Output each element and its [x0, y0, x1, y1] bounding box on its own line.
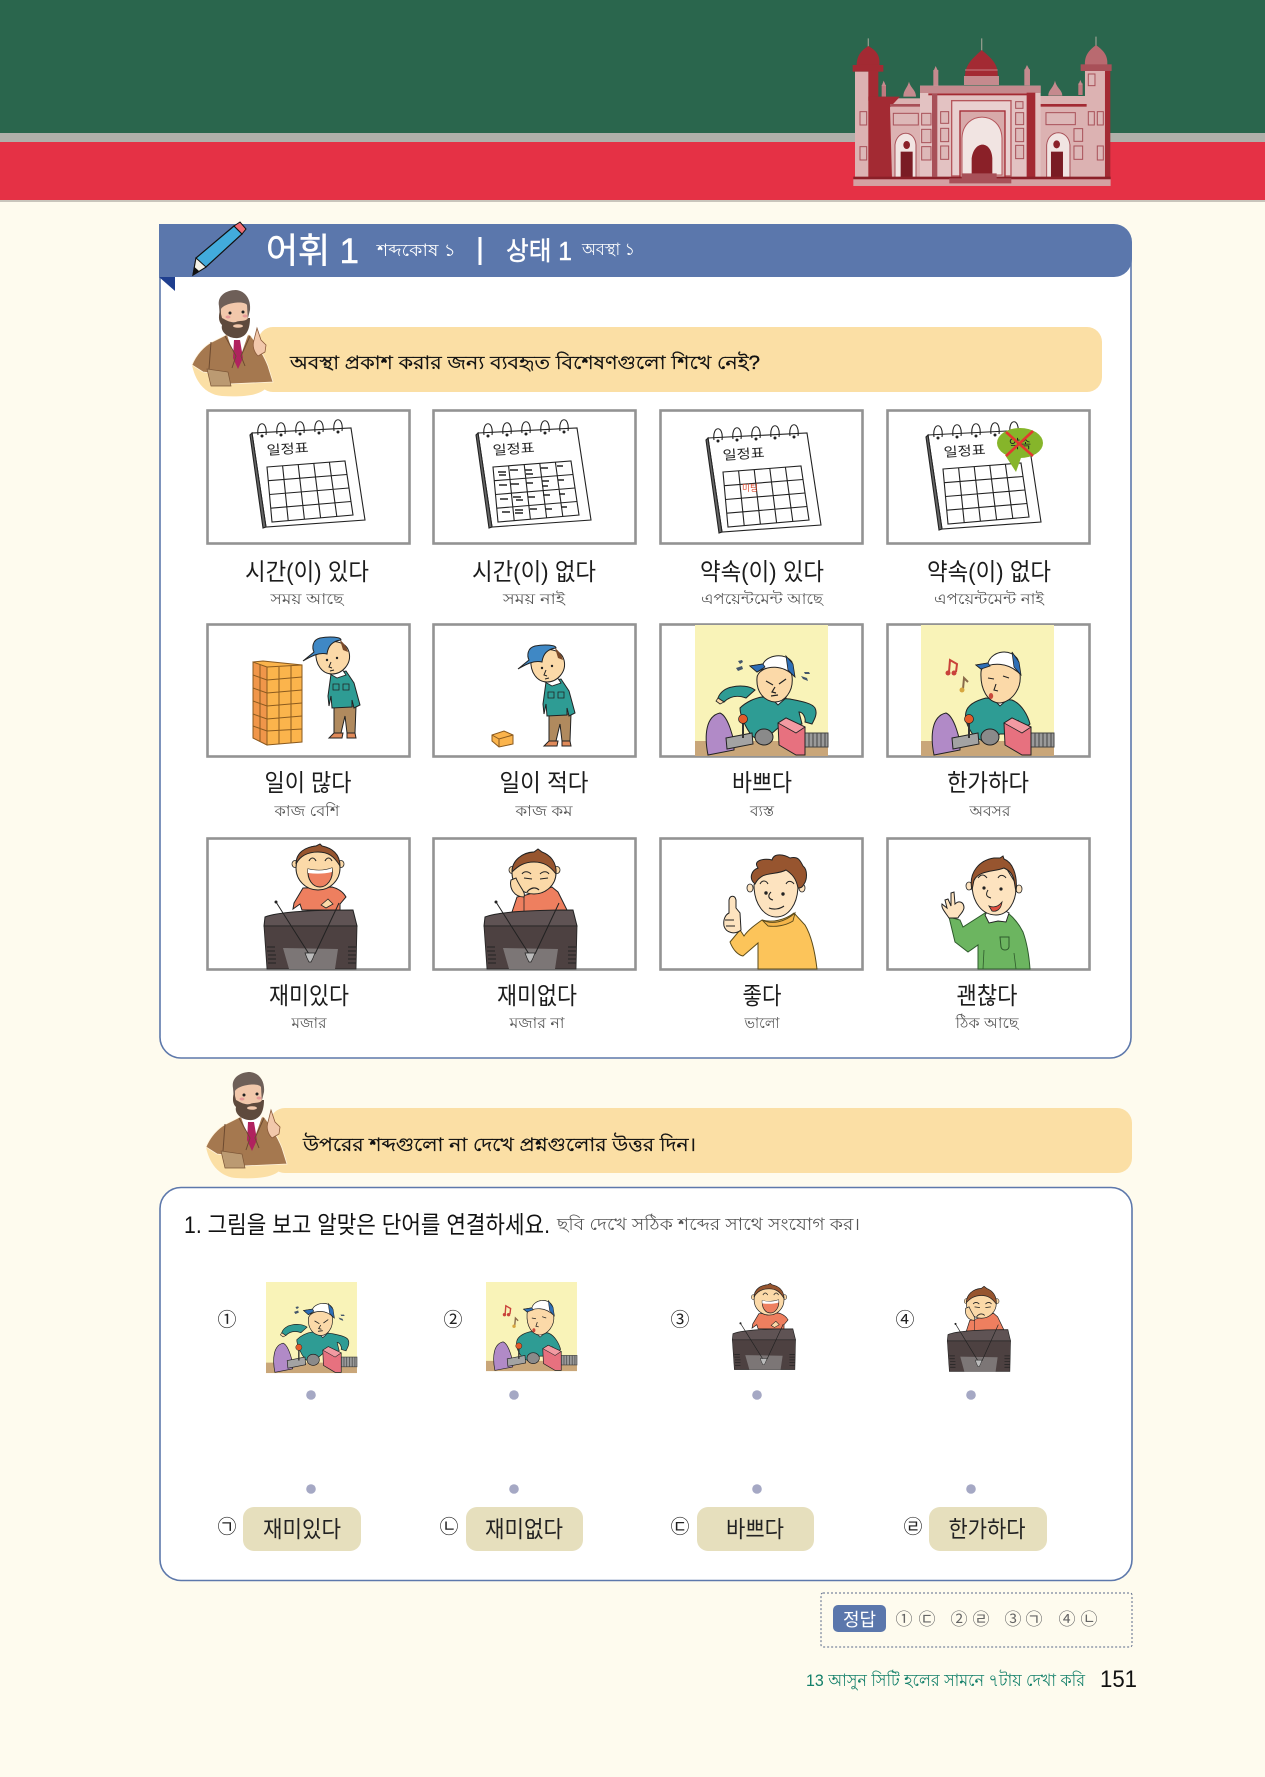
word option 3: 바쁘다 — [726, 1516, 784, 1542]
icon: pencil — [193, 222, 246, 275]
instruction text 2: উপরের শব্দগুলো না দেখে প্রশ্নগুলোর উত্তর দিন। — [302, 1133, 696, 1156]
panel: matching exercise — [160, 1188, 1132, 1580]
card: busy: 바쁘다 — [732, 770, 792, 797]
card: no appointment — [888, 410, 1090, 608]
card: much work: 일이 많다 — [264, 770, 352, 797]
item 3: ③ — [670, 1309, 690, 1331]
card: good: 좋다 — [742, 983, 782, 1010]
card: not fun: 재미없다 — [497, 983, 577, 1010]
card: busy: ব্যস্ত — [749, 803, 774, 820]
word option 3: ㉢ — [670, 1516, 690, 1538]
card: busy — [660, 624, 862, 820]
item 2: ② — [443, 1309, 463, 1331]
card: little work: 일이 적다 — [500, 770, 588, 797]
icon: teacher 2 — [206, 1072, 296, 1178]
card: no time — [434, 410, 636, 608]
card: idle: অবসর — [968, 803, 1011, 820]
word option 4: 한가하다 — [948, 1516, 1026, 1542]
card: no appointment: 일정표 — [943, 442, 986, 460]
card: idle: 한가하다 — [947, 770, 1029, 797]
word option 2: 재미없다 — [485, 1516, 563, 1542]
card: fun — [208, 838, 410, 1032]
card: idle — [888, 624, 1090, 820]
card: much work — [208, 624, 410, 820]
heading: vocabulary 1: 어휘 1 — [266, 232, 359, 271]
instruction bubble — [192, 290, 1102, 396]
card: okay: 괜찮다 — [956, 983, 1018, 1010]
card: no appointment: এপয়েন্টমেন্ট নাই — [934, 590, 1045, 608]
card: have time: 일정표 — [266, 440, 309, 458]
card: not fun — [434, 838, 636, 1032]
card: have appointment: 약속(이) 있다 — [700, 559, 824, 586]
word option 4: ㉣ — [903, 1516, 923, 1538]
item 4: ④ — [895, 1309, 915, 1331]
answer box — [821, 1593, 1132, 1647]
heading: state 1: 상태 1 — [506, 236, 572, 266]
connector dots — [306, 1390, 976, 1494]
instruction text: অবস্থা প্রকাশ করার জন্য ব্যবহৃত বিশেষণগুলো শিখে নেই? — [289, 352, 760, 374]
answer box: ④ — [1058, 1610, 1076, 1629]
word option 1: ㉠ — [217, 1516, 237, 1538]
question translation: ছবি দেখে সঠিক শব্দের সাথে সংযোগ কর। — [556, 1214, 860, 1234]
item 1 — [217, 1282, 357, 1373]
word option 1: 재미있다 — [263, 1516, 341, 1542]
answer box: ㉡ — [1080, 1610, 1098, 1629]
card: no appointment: 약속(이) 없다 — [927, 559, 1051, 586]
card: have time: সময় আছে — [269, 591, 345, 608]
word option 3 — [670, 1507, 814, 1551]
card: have time: 시간(이) 있다 — [245, 559, 369, 586]
card: have appointment: 일정표 — [722, 445, 765, 463]
heading subtitle: শব্দকোষ ১ — [376, 241, 456, 260]
card: little work: কাজ কম — [514, 803, 573, 820]
card: little work — [434, 624, 636, 820]
card: have time — [208, 410, 410, 608]
word option 4 — [903, 1507, 1047, 1551]
card: no time: 일정표 — [492, 440, 535, 458]
answer box: ① — [896, 1610, 912, 1629]
heading state subtitle: অবস্থা ১ — [581, 240, 635, 259]
icon: teacher — [192, 290, 282, 396]
item 3 — [670, 1283, 796, 1370]
word option 2: ㉡ — [439, 1516, 459, 1538]
card: have appointment: 미팅 — [742, 483, 758, 493]
item 2 — [443, 1282, 577, 1371]
card: fun: মজার — [290, 1015, 327, 1032]
card: no time: 시간(이) 없다 — [472, 559, 596, 586]
answer box: 정답 — [843, 1610, 876, 1630]
icon: Lalbagh fort mosque — [853, 37, 1112, 186]
card: okay — [888, 838, 1090, 1032]
card: not fun: মজার না — [508, 1015, 565, 1032]
card: good — [660, 838, 862, 1032]
chapter banner — [0, 0, 1265, 202]
answer box: ㉢ — [918, 1610, 936, 1629]
instruction bubble 2 — [206, 1072, 1132, 1178]
card: no time: সময় নাই — [502, 590, 566, 608]
word option 1 — [217, 1507, 361, 1551]
item 1: ① — [217, 1309, 237, 1331]
card: no appointment: 약속 — [1009, 436, 1031, 451]
answer box: ㉠ — [1026, 1610, 1042, 1629]
answer box: ② — [950, 1610, 968, 1629]
item 4 — [895, 1286, 1011, 1371]
question text: 1. 그림을 보고 알맞은 단어를 연결하세요. — [184, 1212, 550, 1239]
page number: 151 — [1100, 1666, 1137, 1693]
divider — [478, 237, 482, 265]
word option 2 — [439, 1507, 583, 1551]
section header band — [159, 222, 1132, 291]
card: fun: 재미있다 — [269, 983, 349, 1010]
answer box: ㉣ — [972, 1610, 990, 1629]
panel: vocabulary — [159, 222, 1132, 1058]
answer box: ③ — [1004, 1610, 1022, 1629]
card: much work: কাজ বেশি — [273, 802, 341, 820]
card: have appointment: এপয়েন্টমেন্ট আছে — [701, 590, 824, 608]
footer chapter title: 13 আসুন সিটি হলের সামনে ৭টায় দেখা করি — [806, 1670, 1086, 1690]
card: okay: ঠিক আছে — [954, 1014, 1019, 1032]
card: good: ভালো — [744, 1015, 780, 1032]
card: have appointment — [660, 410, 862, 608]
